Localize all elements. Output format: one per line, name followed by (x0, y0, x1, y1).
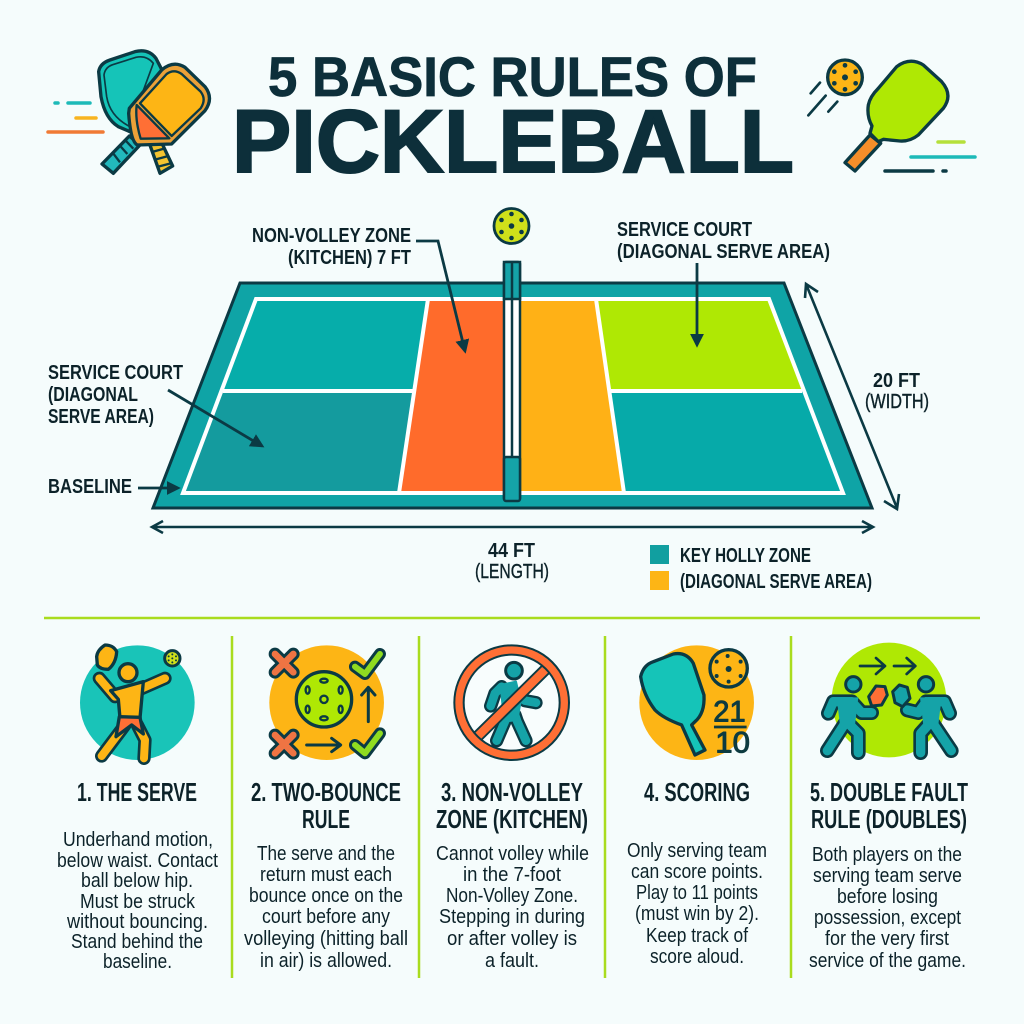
body text (57, 829, 218, 973)
label: non-volley zone: NON-VOLLEY ZONE (252, 225, 411, 247)
body text (244, 843, 408, 972)
heading: 1. THE SERVE (77, 777, 197, 807)
body text: The serve and the (257, 843, 395, 865)
body text: court before any (262, 906, 390, 928)
body text (809, 844, 966, 972)
court zones (183, 299, 843, 493)
body text: ball below hip. (81, 870, 193, 892)
icon: lime paddle and ball (808, 60, 948, 171)
label: 44 ft length: (LENGTH) (475, 561, 549, 583)
legend: (DIAGONAL SERVE AREA) (680, 571, 872, 593)
body text: Underhand motion, (63, 829, 213, 851)
legend (650, 545, 872, 593)
label: service court right: SERVICE COURT (617, 219, 752, 241)
body text: (must win by 2). (635, 903, 759, 925)
label: service court left: (DIAGONAL (48, 384, 138, 406)
body text (436, 843, 589, 972)
icon: crossed paddles (99, 51, 209, 173)
heading: RULE (302, 804, 350, 834)
label: 20 ft width (865, 370, 929, 413)
court surround (153, 283, 872, 508)
body text: bounce once on the (249, 885, 403, 907)
label: non-volley zone: (KITCHEN) 7 FT (288, 247, 411, 269)
panel: rule 2 two-bounce (244, 645, 408, 972)
body text: volleying (hitting ball (244, 928, 408, 950)
body text: Must be struck (80, 891, 196, 913)
panel: rule 4 scoring (627, 645, 767, 968)
title: 5 BASIC RULES OF (268, 45, 757, 108)
label: 20 ft width: 20 FT (873, 370, 920, 392)
body text: Only serving team (627, 840, 767, 862)
speed lines left (48, 103, 103, 132)
body text: before losing (837, 886, 938, 908)
label: 20 ft width: (WIDTH) (865, 391, 929, 413)
label: service court left (48, 362, 262, 446)
body text: possession, except (814, 907, 961, 929)
body text: can score points. (631, 861, 763, 883)
panel: rule 1 the serve (57, 645, 218, 973)
heading: 3. NON-VOLLEY (441, 777, 583, 807)
heading (251, 777, 401, 834)
label: 44 ft length: 44 FT (488, 540, 535, 562)
body text: Stepping in during (439, 906, 585, 928)
speed lines right (885, 142, 975, 171)
icon: two doubles players (827, 643, 951, 757)
body text: score aloud. (650, 946, 744, 968)
body text: for the very first (825, 928, 949, 950)
heading: 4. SCORING (644, 777, 750, 807)
dimension arrow: width (805, 284, 899, 509)
icon: no walking sign (454, 645, 569, 760)
label: baseline: BASELINE (48, 476, 132, 498)
body text: serving team serve (813, 865, 962, 887)
body text: or after volley is (447, 928, 577, 950)
body text: Stand behind the (71, 931, 203, 953)
title: PICKLEBALL (232, 91, 794, 191)
label: 44 ft length (475, 540, 549, 583)
icon: paddle, ball and score (639, 645, 754, 760)
heading (810, 777, 968, 834)
panel: rule 5 double fault (809, 643, 968, 972)
heading: 2. TWO-BOUNCE (251, 777, 401, 807)
body text: return must each (260, 864, 392, 886)
body text: service of the game. (809, 950, 966, 972)
legend: KEY HOLLY ZONE (680, 545, 811, 567)
body text: in the 7-foot (463, 864, 561, 886)
label: service court right: (DIAGONAL SERVE AREA) (617, 241, 830, 263)
ball above net (494, 208, 529, 244)
heading (436, 777, 588, 834)
body text: Play to 11 points (636, 882, 758, 904)
body text: Cannot volley while (436, 843, 589, 865)
label: service court right (617, 219, 830, 345)
heading: ZONE (KITCHEN) (436, 804, 588, 834)
label: service court left: SERVICE COURT (48, 362, 183, 384)
label: service court left: SERVE AREA) (48, 406, 154, 428)
title (232, 45, 794, 191)
body text: a fault. (485, 950, 539, 972)
panel: rule 3 non-volley zone (436, 645, 589, 972)
net (504, 262, 520, 501)
icon: serving player (80, 645, 195, 760)
court diagram (153, 262, 872, 508)
dimension arrow: length (152, 521, 873, 533)
icon: paddle, ball and score: 21 (713, 696, 746, 729)
body text: Keep track of (646, 925, 748, 947)
body text: without bouncing. (66, 911, 208, 933)
label: non-volley zone (252, 225, 465, 351)
body text: below waist. Contact (57, 850, 218, 872)
body text: Non-Volley Zone. (446, 885, 578, 907)
body text: baseline. (103, 951, 172, 973)
court white lines (183, 299, 843, 493)
icon: bounce ball with marks (269, 645, 384, 760)
body text: Both players on the (812, 844, 962, 866)
body text: in air) is allowed. (260, 950, 392, 972)
icon: paddle, ball and score: 10 (715, 727, 750, 760)
body text (627, 840, 767, 968)
